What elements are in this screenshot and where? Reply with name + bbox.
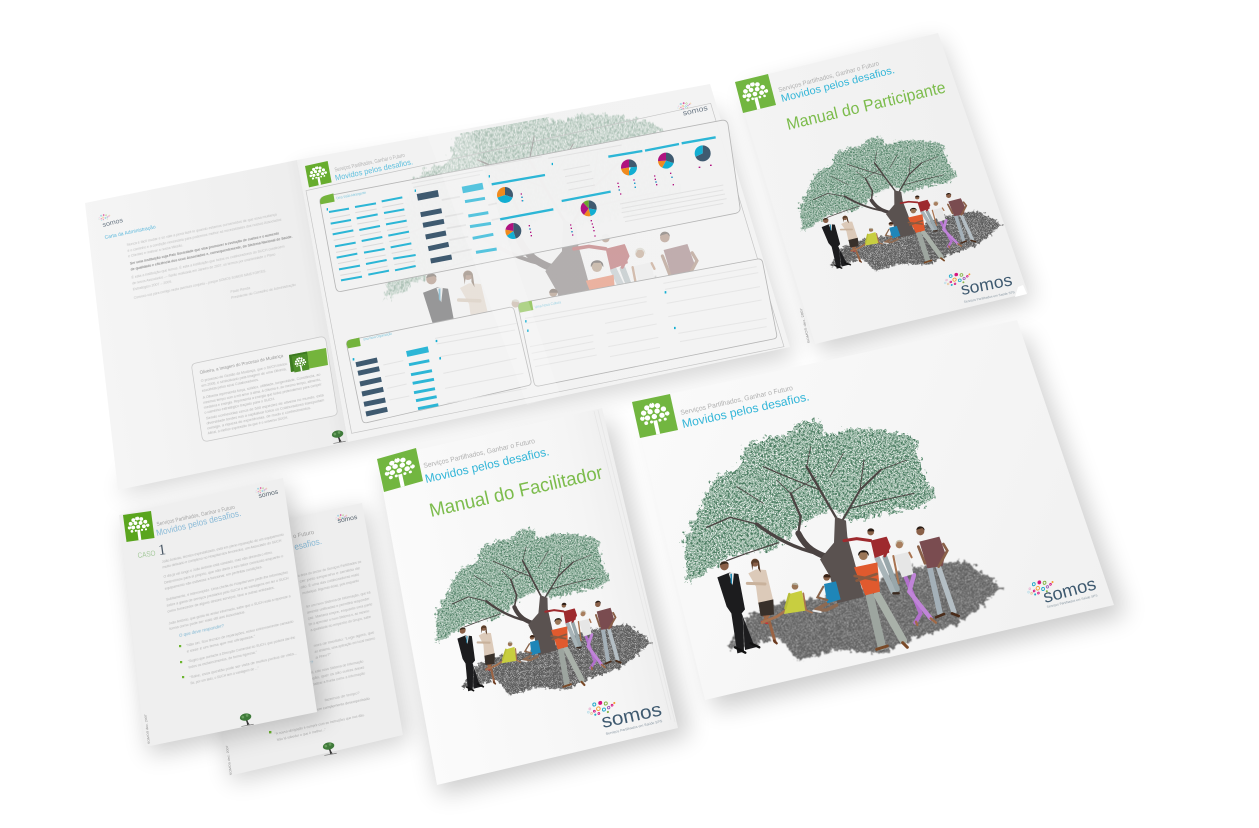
text block: Oliveira body: Afinal, a melhor expressão do que é o universo SUCH. xyxy=(207,415,288,435)
slogan: Movidos pelos desafios. xyxy=(681,389,811,431)
text block: letter body: Convoco-vos para comigo nesta aventura conjunta – porque SOMOS SOMOS MAIS FORTES. xyxy=(134,269,266,300)
logo: somos: Serviços Partilhados em Saúde SPS xyxy=(1046,593,1098,609)
logo: somos xyxy=(943,270,1015,304)
logo: left page somos: somos xyxy=(102,217,125,229)
dark table bars xyxy=(417,193,452,261)
text block: case 2 body: a área do sector de Serviços Partilhados se xyxy=(298,560,362,578)
icon: green tile xyxy=(735,74,776,113)
cover sheet xyxy=(377,408,678,785)
icon: left page tree xyxy=(331,429,346,443)
panel: open brochure spread xyxy=(85,84,795,497)
text block: letter body: Presidente do Conselho de Administração xyxy=(231,283,296,300)
text block: case 1 body: João António, técnico especializado, está em pleno reparação de um equipamento xyxy=(162,532,284,564)
slogan: Serviços Partilhados, Ganhar o Futuro xyxy=(423,438,536,470)
text block: case 2 questions xyxy=(303,649,368,706)
heading: spread slogan: Movidos pelos desafios. xyxy=(334,157,414,183)
edition note: SOMOS dez. 2007 xyxy=(799,307,811,344)
slogan: Serviços Partilhados, Ganhar o Futuro xyxy=(680,385,794,417)
slogan: Serviços Partilhados, Ganhar o Futuro xyxy=(778,60,880,94)
icon: spread tile xyxy=(305,161,332,187)
text block: case 1 body: muito delicado e complexo no Hospital dos Arvoredos, um Associado do SUCH xyxy=(162,539,282,570)
text block: letter body: Estratégico 2007 – 2009. xyxy=(133,279,172,291)
pie chart 1 xyxy=(501,191,509,199)
text block: Oliveira body: diversidade tendes nos a capitalizar todos os Colaboradores transportam xyxy=(206,398,325,425)
text block: case 2 body: afio. É uma das colaboradoras mais xyxy=(300,571,360,590)
text block: case 1 body: “Sugiro que contacte a Direcção Comercial do SUCH, que poderá dar-lhe xyxy=(188,635,296,664)
logo: somos: somos xyxy=(600,699,664,733)
icon: green tile xyxy=(377,448,423,492)
bullet markers xyxy=(327,164,553,209)
illustration: tree and people xyxy=(683,421,1001,661)
icon: mini tree xyxy=(239,712,254,726)
text block: case 1 body: Determinou para si próprio, que não daria o seu labor concluído enquanto o xyxy=(164,554,283,585)
illustration: tree and people xyxy=(431,526,657,697)
logo: somos: Serviços Partilhados em Saúde SPS xyxy=(963,290,1015,304)
icon: Oliveira tile xyxy=(289,348,328,372)
icon: green tile xyxy=(632,394,678,438)
heading: lower right card: Uma Nova Cultura xyxy=(534,300,562,309)
grid cell outlines xyxy=(330,203,415,275)
title: Manual do Participante: Manual do Participante xyxy=(785,79,947,134)
text block: case 2 body: ter um novo Sistema de Informação, que irá xyxy=(306,590,371,609)
panel: lower right card xyxy=(518,259,777,386)
text block: case 1 body: Subitamente, é interrompido. Uma chefia do Hospital vem pedir-lhe informações xyxy=(166,570,288,602)
logo: somos xyxy=(587,699,664,736)
logo: somos: somos xyxy=(1041,574,1098,607)
panel: large landscape cover xyxy=(632,320,1126,710)
title: Manual do Facilitador: Manual do Facilitador xyxy=(427,462,605,522)
text block: case 1 body: João António, que gosta de andar informado, sabe que o SUCH está a repensar a xyxy=(168,594,291,625)
text block: Oliveira body: consigo, a riqueza de experiências, de modo e conhecimentos. xyxy=(207,406,311,430)
text block: case 2 body: ao sistema, uma aplicação em local mesmo xyxy=(314,636,375,654)
tab: lower left card xyxy=(347,338,361,348)
bullet: case 2 closing answer: “A nossa obrigação é cumprir com as instruções que nos dão. xyxy=(274,713,365,736)
logo: spread somos: somos xyxy=(682,103,709,118)
text block: letter body: É esta a instituição que temos. É esta a instituição que todos os colaboradores do SUCH constroem xyxy=(131,244,285,280)
fold highlight xyxy=(422,113,560,405)
logo: somos: somos xyxy=(337,514,359,525)
heading: CASO 1 xyxy=(137,542,167,560)
pie chart 3 xyxy=(585,204,593,212)
heading: top card: Uma Visão Abrangente xyxy=(336,191,366,200)
text block: case 1 body: O que deve responder? xyxy=(179,623,225,638)
logo: somos xyxy=(255,486,280,500)
text block: case 2 questions: ificação, quer os são outras áreas xyxy=(305,665,365,682)
text block: case 1 body: como fornecedor de alguns desses serviços, face a outras entidades. xyxy=(167,585,275,613)
text block: case 1 body xyxy=(162,532,298,689)
sheet xyxy=(193,503,403,776)
wide cyan chart headers xyxy=(492,137,716,219)
text block: letter body: Paulo Renda xyxy=(230,286,250,294)
panel: lower left card xyxy=(347,307,531,423)
bullet: case 2 closing answer: Não lá sabedor o que é melhor...” xyxy=(276,728,327,742)
panel: case sheet back xyxy=(193,503,410,782)
text block: case 1 body: forma como pode ser mais útil aos Associados. xyxy=(169,610,246,631)
text block: case 2 body: ter a aprender o novo Sistema e, ao mesmo xyxy=(308,609,370,627)
icon: green tile xyxy=(123,511,154,542)
text block: letter body: Ser uma instituição cuja Pais Sociedade que visa promover a evolução de custos e o aumento xyxy=(130,231,280,266)
text block: case 2 body: mudanças. Algumas delas, pois enquanto xyxy=(302,579,359,595)
heading: Carta da Administração: Carta da Administração xyxy=(104,224,156,241)
text block: case 1 body: “Não sei. Sou técnico de reparações, estou extremamente cansado xyxy=(186,620,294,648)
text block: case 1 body: todos os esclarecimentos, de forma rigorosa.” xyxy=(188,650,257,670)
slogan fragment: esafios. xyxy=(293,536,323,552)
panel: Manual do Facilitador cover xyxy=(377,408,690,795)
bullet markers xyxy=(525,292,676,331)
text block: case 1 body: O dia já vai longo e João António está cansado, mas não abranda o ritmo. xyxy=(163,550,273,579)
bullet markers xyxy=(179,645,184,678)
tab: top card xyxy=(320,193,335,204)
brochure contents in panels xyxy=(305,101,784,433)
text block: case 2 body: nora de imediato: “Logo agora, que xyxy=(314,630,375,648)
text block: Oliveira body xyxy=(201,355,326,435)
text block: Oliveira body: O processo de Gestão da Mudança, que o SUCH iniciou xyxy=(201,362,288,383)
text block: letter body: de qualidade e eficiência dos seus Associados e, consequentemente, do Sistema Nacional de Saúde. xyxy=(130,235,293,272)
pie chart 6 xyxy=(699,149,707,157)
logo: spread somos xyxy=(677,101,709,118)
panel: Manual do Participante cover xyxy=(735,33,1034,354)
text block: case 2 body: ças. Mariana empre, enquanto uma parte xyxy=(308,602,373,621)
logo: somos: somos xyxy=(959,270,1014,299)
text block: case 2 questions: der? xyxy=(303,660,314,666)
slogan fragment xyxy=(289,530,323,552)
pie chart 5 xyxy=(662,157,670,165)
text block: Oliveira body: medicina e energia. Representa a energia que todos pretendemos para cumprir xyxy=(204,382,323,410)
text block: case 1 body: Se, por um lado, o SUCH tem a vantagem de ...” xyxy=(190,666,259,685)
bullet markers xyxy=(353,341,441,359)
text block: case 1 body: e esse é um tema que me ultrapassa.” xyxy=(187,634,255,654)
logo: left page somos xyxy=(98,213,125,229)
cyan header grid xyxy=(329,197,416,280)
pie chart 2 xyxy=(509,227,517,235)
text block: letter body: Nunca é fácil mudar e só vale a pena fazê-lo quando estamos convencidos de que essa mudança xyxy=(127,212,277,247)
icon: mini tree xyxy=(322,741,337,755)
slogan: Movidos pelos desafios. xyxy=(155,508,242,538)
text block: case 2 questions: fazemos de tempo? xyxy=(324,691,360,702)
text block: case 2 questions: specializar a fronta como a informação xyxy=(306,671,365,688)
chart legends xyxy=(521,165,712,236)
slogan fragment: r o Futuro xyxy=(289,530,315,541)
logo: somos: Serviços Partilhados em Saúde SPS xyxy=(605,719,663,736)
text block: Oliveira body: o caminho estratégico traçado para o SUCH. xyxy=(204,397,275,415)
text block: case 2 body: a Rev?” xyxy=(315,652,331,660)
text block: letter body xyxy=(127,210,298,320)
slogan: Serviços Partilhados, Ganhar o Futuro xyxy=(156,505,236,528)
page stack edge xyxy=(594,410,675,722)
cyan bars xyxy=(407,349,438,409)
text block: Oliveira body: mesmos tempo com a mil amor à alma. A Oliveira é, ao mesmo tempo, alimento, xyxy=(203,377,321,405)
cover sheet xyxy=(735,33,1028,344)
logo: somos: somos xyxy=(258,488,280,500)
faint text lines xyxy=(525,267,767,367)
panel: case sheet front xyxy=(119,478,326,755)
illustration: tree and people xyxy=(795,132,1004,274)
text block: Oliveira body: em 2006, é simbolizado pela imagem de uma Oliveira, xyxy=(201,367,287,388)
heading: Oliveira: Oliveira, a Imagem do Processo de Mudança xyxy=(199,353,284,375)
faint table xyxy=(383,323,527,403)
slogan: Movidos pelos desafios. xyxy=(780,64,896,105)
edition note: SOMOS dez. 2007 xyxy=(225,745,233,775)
text block: case 1 body: equipamento não estivesse a funcionar, em perfeitas condições. xyxy=(165,565,263,591)
text block: letter body: e Clientes e realizar a nossa Missão. xyxy=(128,243,183,259)
edition note: SOMOS dez. 2007 xyxy=(143,714,151,744)
text block: case 2 body xyxy=(298,559,378,661)
text: case 2 closing line: O trabalho que fazemos vai em complemento desempenhado xyxy=(272,696,370,721)
brochure left page xyxy=(85,160,348,490)
tab: lower right card xyxy=(518,301,533,313)
heading: spread slogan: Serviços Partilhados, Ganhar o Futuro xyxy=(334,153,406,174)
heading: lower left card: Uma Nova Organização xyxy=(363,332,392,342)
callout: Oliveira panel xyxy=(192,337,337,441)
text block: Oliveira body: escolhida pelos seus Colaboradores. xyxy=(202,378,259,393)
text block: case 1 body: “Sabe, essa questão pode ser vista de muitos pontos de vista... xyxy=(189,651,297,679)
dark bars xyxy=(356,360,387,414)
cover sheet xyxy=(632,320,1114,700)
sheet xyxy=(119,478,317,747)
text block: case 2 questions: s vital, este novo Sistema de Informação xyxy=(305,659,364,676)
panel: top results card xyxy=(320,120,740,291)
text block: Oliveira body: Sendo conhecidas cerca de 500 espécies de oliveira no mundo, esta xyxy=(206,393,324,420)
pie chart 4 xyxy=(625,163,633,171)
text block: case 1 body: sobre a gama de serviços prestados pelo SUCH e as vantagens em ter o SUCH xyxy=(167,576,289,608)
text block: letter body: de novos Associados — Serão realizada em Janeiro de 2007, os termos por unanimidade o Plano xyxy=(132,252,276,286)
table rows xyxy=(442,197,500,253)
heading: CASO 1: CASO xyxy=(137,549,156,560)
brochure right page xyxy=(297,84,790,442)
text block: Oliveira body: A Oliveira representa força, solidez, utilidade, longevidade. Constância, ao xyxy=(203,372,321,400)
cyan table bars xyxy=(462,186,497,252)
faded tree and people illustration xyxy=(383,112,699,323)
faint text lines xyxy=(412,145,727,222)
heading: CASO 1: 1 xyxy=(157,542,167,559)
text block: letter body: é o caminho e a condição necessária para podermos melhor as necessidades dos nossos Associados xyxy=(127,217,282,253)
back page edge xyxy=(1015,285,1027,297)
text block: case 2 body: cer pelo empenho e sentido de xyxy=(299,566,361,584)
text block: case 2 body: amente unificadas e permitirá responder xyxy=(307,596,371,615)
slogan: Movidos pelos desafios. xyxy=(424,444,551,486)
text block: case 2 body: a qualidade do empenho do Grupo, sabe xyxy=(310,615,371,632)
